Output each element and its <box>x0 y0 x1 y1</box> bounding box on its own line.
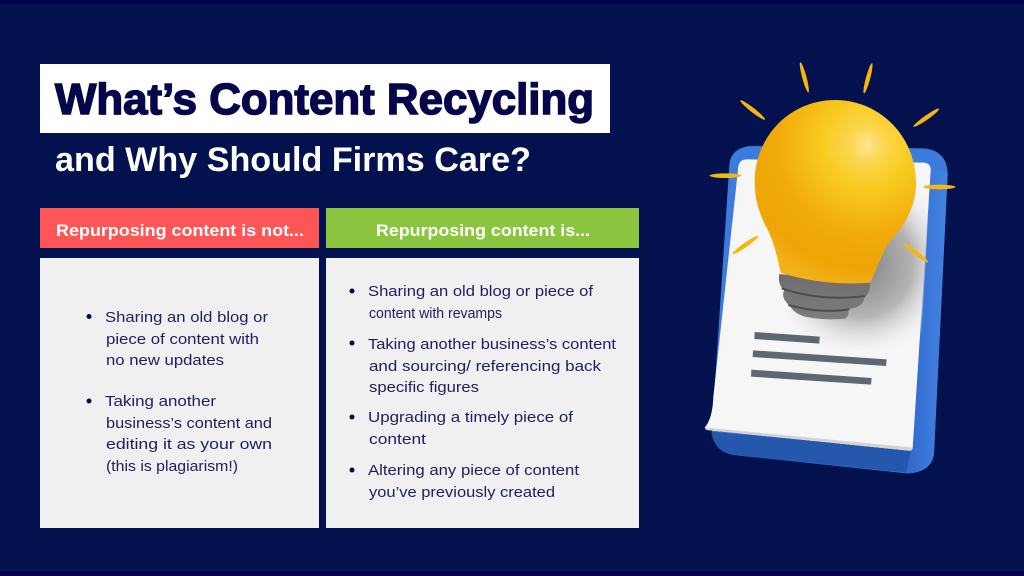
bullet: altering: Altering any piece of content <box>368 463 579 479</box>
bullet: altering: you’ve previously created <box>369 485 555 501</box>
bullet: old blog: piece of content with <box>106 332 259 348</box>
bullet: plagiarism: editing it as your own <box>106 437 272 453</box>
paper lower edge <box>705 427 913 451</box>
illustration: light bulb on clipboard <box>705 62 955 473</box>
clipboard bottom edge <box>712 432 911 473</box>
panel: not list <box>40 258 319 528</box>
bullet: old blog <box>86 310 268 369</box>
bullet: upgrading: Upgrading a timely piece of <box>368 410 574 426</box>
bullet: sourcing: Taking another business’s content <box>368 337 616 353</box>
bulb base <box>779 274 870 319</box>
bullet: revamps: content with revamps <box>369 306 502 322</box>
light rays <box>710 62 955 264</box>
bullet: revamps: Sharing an old blog or piece of <box>368 284 594 300</box>
bulb <box>755 100 916 284</box>
bulb shadow <box>790 170 931 350</box>
panel header: repurposing content is <box>326 208 639 248</box>
title banner: What’s Content Recycling <box>55 75 594 124</box>
panel: is list <box>326 258 639 528</box>
bullet: upgrading: content <box>369 432 426 448</box>
bullet: plagiarism <box>86 394 272 475</box>
title banner <box>40 64 610 133</box>
bullet: upgrading <box>350 410 574 448</box>
panel header: repurposing content is not: Repurposing content is not... <box>56 222 304 240</box>
bullet: old blog: no new updates <box>106 353 224 369</box>
panel header: repurposing content is not <box>40 208 319 248</box>
bullet: sourcing: and sourcing/ referencing back <box>369 359 602 375</box>
text lines <box>751 332 887 385</box>
subtitle: and Why Should Firms Care? <box>55 141 531 179</box>
bullet: plagiarism: (this is plagiarism!) <box>106 459 238 475</box>
clipboard right side <box>907 165 948 473</box>
bullet: sourcing: specific figures <box>369 380 479 396</box>
paper sheet <box>705 159 931 451</box>
clipboard board <box>712 146 948 473</box>
bullet: revamps <box>350 284 594 322</box>
bullet: sourcing <box>350 337 616 396</box>
panel header: repurposing content is: Repurposing content is... <box>376 222 590 240</box>
bullet: altering <box>350 463 579 501</box>
bullet: plagiarism: Taking another <box>105 394 216 410</box>
bullet: old blog: Sharing an old blog or <box>105 310 268 326</box>
bullet: plagiarism: business’s content and <box>106 416 272 432</box>
